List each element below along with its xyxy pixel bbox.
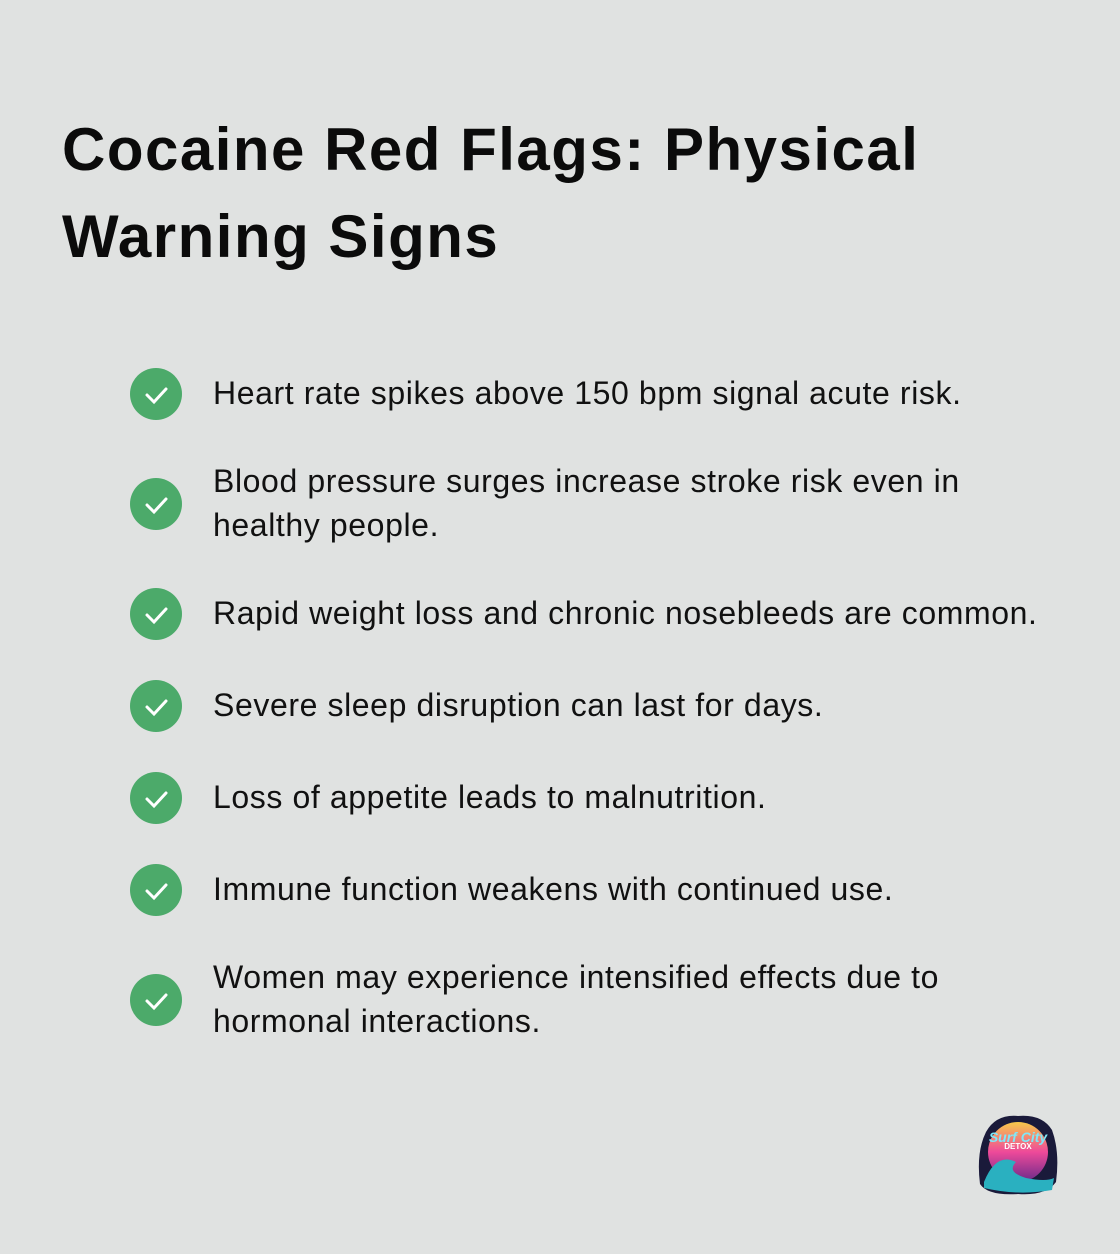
item 3: Rapid weight loss and chronic nosebleeds are common. bbox=[213, 595, 1038, 631]
item 5: Loss of appetite leads to malnutrition. bbox=[213, 779, 766, 815]
logo: DETOX bbox=[1004, 1142, 1032, 1151]
logo: Surf City bbox=[989, 1129, 1048, 1145]
item 7 bbox=[130, 959, 939, 1039]
item 6 bbox=[130, 864, 893, 916]
item 2: Blood pressure surges increase stroke risk even in bbox=[213, 463, 960, 499]
title bbox=[62, 116, 919, 270]
item 1: Heart rate spikes above 150 bpm signal acute risk. bbox=[213, 375, 962, 411]
item 7: hormonal interactions. bbox=[213, 1003, 541, 1039]
title: Warning Signs bbox=[62, 203, 499, 270]
item 5 bbox=[130, 772, 766, 824]
title: Cocaine Red Flags: Physical bbox=[62, 116, 919, 183]
item 2 bbox=[130, 463, 960, 543]
item 7: Women may experience intensified effects due to bbox=[213, 959, 939, 995]
logo bbox=[978, 1116, 1058, 1194]
item 3 bbox=[130, 588, 1038, 640]
item 6: Immune function weakens with continued use. bbox=[213, 871, 893, 907]
item 1 bbox=[130, 368, 962, 420]
item 4 bbox=[130, 680, 823, 732]
item 2: healthy people. bbox=[213, 507, 439, 543]
item 4: Severe sleep disruption can last for days. bbox=[213, 687, 823, 723]
